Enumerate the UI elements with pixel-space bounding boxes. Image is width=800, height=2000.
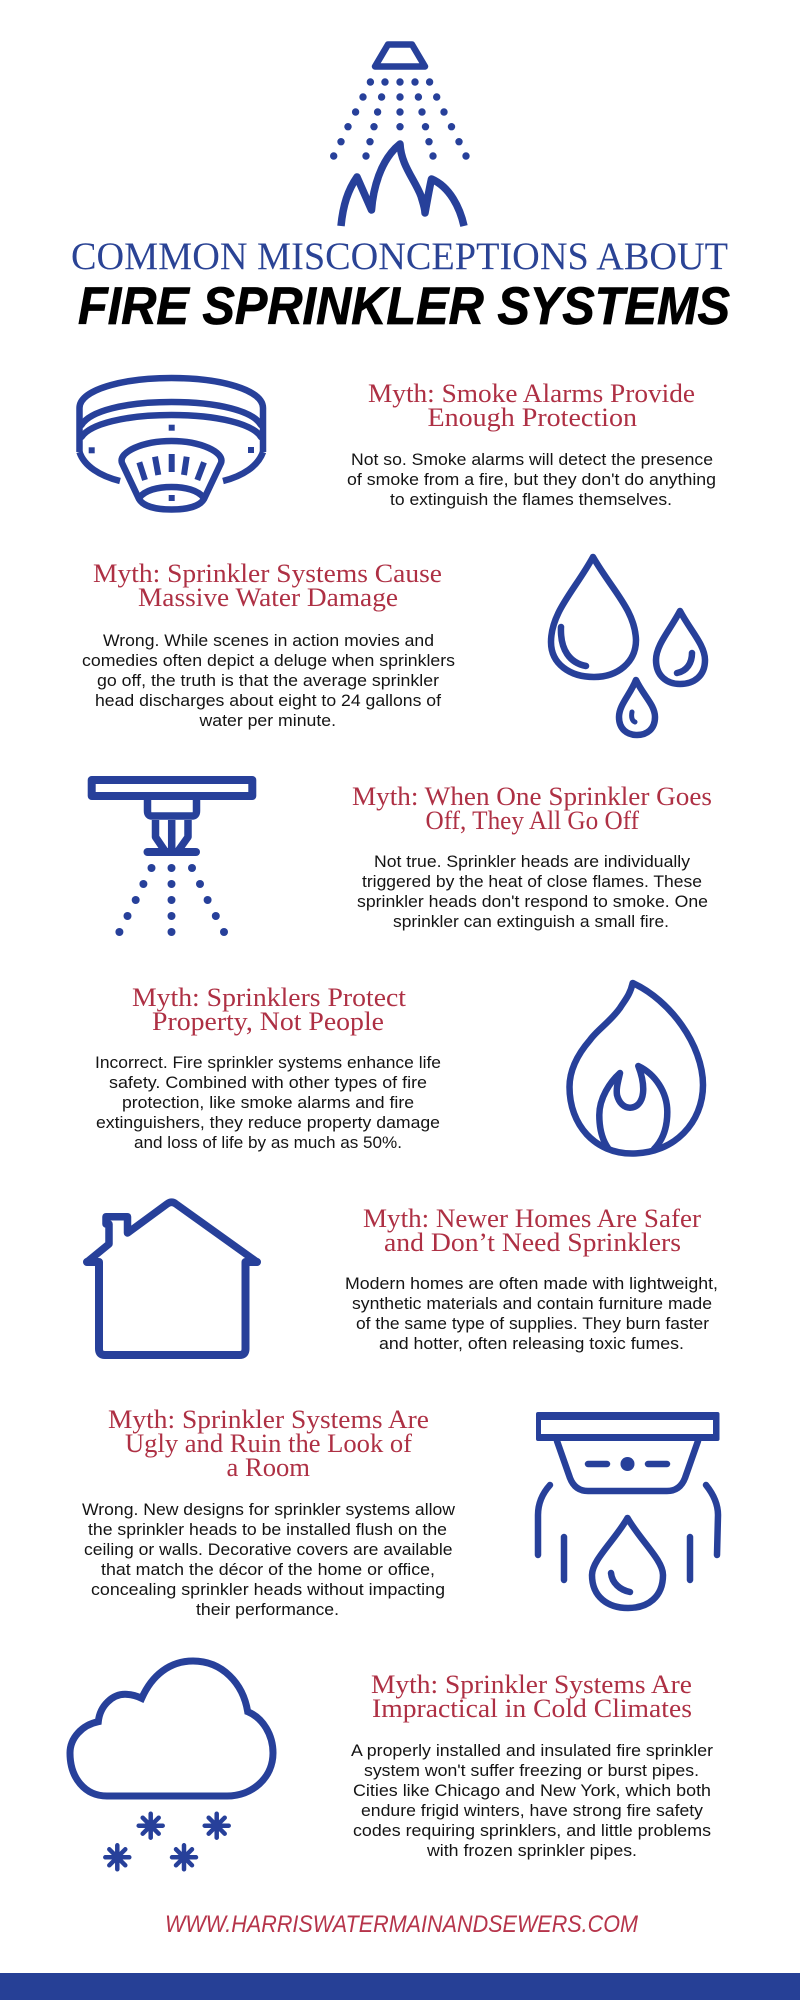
- heading: myth 4: Myth: Sprinklers Protect: [132, 982, 407, 1012]
- panel: myth 7 cold climates: [70, 1661, 713, 1869]
- header: [71, 44, 730, 336]
- heading: myth 7: Myth: Sprinkler Systems Are: [371, 1669, 692, 1699]
- text: myth 1 body: to extinguish the flames themselves.: [390, 490, 672, 509]
- heading: myth 6: a Room: [226, 1452, 310, 1482]
- icon: snow cloud: [70, 1661, 273, 1869]
- heading: myth 3: [352, 781, 712, 835]
- text: myth 2 body: go off, the truth is that the average sprinkler: [97, 671, 439, 690]
- text: myth 3 body: [357, 852, 708, 931]
- footer website: WWW.HARRISWATERMAINANDSEWERS.COM: [165, 1911, 638, 1938]
- panel: myth 3 all go off: [92, 780, 712, 936]
- text: myth 2 body: water per minute.: [198, 711, 336, 730]
- text: myth 5 body: synthetic materials and contain furniture made: [352, 1294, 712, 1313]
- panel: myth 5 newer homes: [87, 1202, 718, 1355]
- text: myth 3 body: sprinkler heads don't respond to smoke. One: [357, 892, 708, 911]
- text: myth 6 body: ceiling or walls. Decorative covers are available: [84, 1540, 453, 1559]
- text: myth 4 body: protection, like smoke alarms and fire: [122, 1093, 414, 1112]
- text: myth 3 body: sprinkler can extinguish a small fire.: [393, 912, 669, 931]
- heading: myth 3: Myth: When One Sprinkler Goes: [352, 781, 712, 811]
- heading: myth 2: Myth: Sprinkler Systems Cause: [93, 558, 442, 588]
- panel: myth 1 smoke alarms: [80, 378, 716, 510]
- text: myth 4 body: and loss of life by as much as 50%.: [134, 1133, 402, 1152]
- icon: water drops: [551, 557, 705, 735]
- heading: myth 2: [93, 558, 442, 612]
- text: myth 5 body: of the same type of supplies. They burn faster: [356, 1314, 709, 1333]
- icon: ceiling sprinkler head: [92, 780, 252, 936]
- text: myth 7 body: codes requiring sprinklers, and little problems: [353, 1821, 711, 1840]
- text: myth 1 body: Not so. Smoke alarms will detect the presence: [351, 450, 713, 469]
- heading: myth 2: Massive Water Damage: [138, 582, 398, 612]
- icon: flame: [570, 983, 703, 1154]
- text: myth 7 body: Cities like Chicago and New York, which both: [353, 1781, 711, 1800]
- heading: myth 4: [132, 982, 407, 1036]
- text: myth 2 body: Wrong. While scenes in action movies and: [103, 631, 434, 650]
- text: myth 6 body: [82, 1500, 456, 1619]
- text: myth 2 body: [82, 631, 455, 730]
- heading: myth 1: Enough Protection: [428, 402, 637, 432]
- text: myth 6 body: their performance.: [196, 1600, 339, 1619]
- text: myth 5 body: and hotter, often releasing toxic fumes.: [379, 1334, 684, 1353]
- text: myth 6 body: Wrong. New designs for sprinkler systems allow: [82, 1500, 456, 1519]
- text: myth 7 body: endure frigid winters, have strong fire safety: [361, 1801, 704, 1820]
- heading: myth 6: [108, 1404, 429, 1482]
- text: myth 5 body: Modern homes are often made with lightweight,: [345, 1274, 718, 1293]
- text: myth 2 body: head discharges about eight to 24 gallons of: [95, 691, 441, 710]
- text: myth 2 body: comedies often depict a deluge when sprinklers: [82, 651, 455, 670]
- heading: myth 6: Ugly and Ruin the Look of: [125, 1428, 412, 1458]
- text: myth 7 body: system won't suffer freezing or burst pipes.: [364, 1761, 699, 1780]
- heading: myth 7: Impractical in Cold Climates: [372, 1693, 692, 1723]
- heading: myth 1: [368, 378, 695, 432]
- text: myth 3 body: triggered by the heat of close flames. These: [362, 872, 702, 891]
- text: myth 5 body: [345, 1274, 718, 1353]
- text: myth 4 body: safety. Combined with other types of fire: [109, 1073, 427, 1092]
- panel: myth 6 ugly: [82, 1404, 720, 1619]
- heading: myth 5: and Don’t Need Sprinklers: [384, 1227, 681, 1257]
- heading: myth 3: Off, They All Go Off: [426, 805, 639, 835]
- panel: myth 4 property not people: [95, 982, 703, 1154]
- heading: myth 7: [371, 1669, 692, 1723]
- text: myth 1 body: [347, 450, 716, 509]
- heading: myth 4: Property, Not People: [152, 1006, 384, 1036]
- text: myth 1 body: of smoke from a fire, but they don't do anything: [347, 470, 716, 489]
- title line 1: COMMON MISCONCEPTIONS ABOUT: [71, 235, 728, 278]
- icon: house: [87, 1202, 257, 1355]
- text: myth 7 body: A properly installed and insulated fire sprinkler: [351, 1741, 713, 1760]
- heading: myth 6: Myth: Sprinkler Systems Are: [108, 1404, 429, 1434]
- text: myth 4 body: Incorrect. Fire sprinkler systems enhance life: [95, 1053, 441, 1072]
- icon: flush sprinkler with drop: [536, 1412, 720, 1608]
- heading: myth 5: Myth: Newer Homes Are Safer: [363, 1203, 701, 1233]
- text: myth 7 body: with frozen sprinkler pipes.: [426, 1841, 637, 1860]
- text: myth 3 body: Not true. Sprinkler heads are individually: [374, 852, 691, 871]
- text: myth 6 body: concealing sprinkler heads without impacting: [91, 1580, 445, 1599]
- text: myth 4 body: [95, 1053, 441, 1152]
- text: myth 7 body: [351, 1741, 713, 1860]
- heading: myth 5: [363, 1203, 701, 1257]
- text: myth 6 body: that match the décor of the home or office,: [101, 1560, 435, 1579]
- icon: sprinkler spraying flame: [330, 44, 470, 226]
- footer bar: [0, 1973, 800, 2000]
- text: myth 6 body: the sprinkler heads to be installed flush on the: [88, 1520, 447, 1539]
- title line 2: FIRE SPRINKLER SYSTEMS: [78, 277, 730, 336]
- text: myth 4 body: extinguishers, they reduce property damage: [96, 1113, 440, 1132]
- panel: myth 2 water damage: [82, 557, 705, 735]
- heading: myth 1: Myth: Smoke Alarms Provide: [368, 378, 695, 408]
- icon: smoke alarm: [80, 378, 263, 510]
